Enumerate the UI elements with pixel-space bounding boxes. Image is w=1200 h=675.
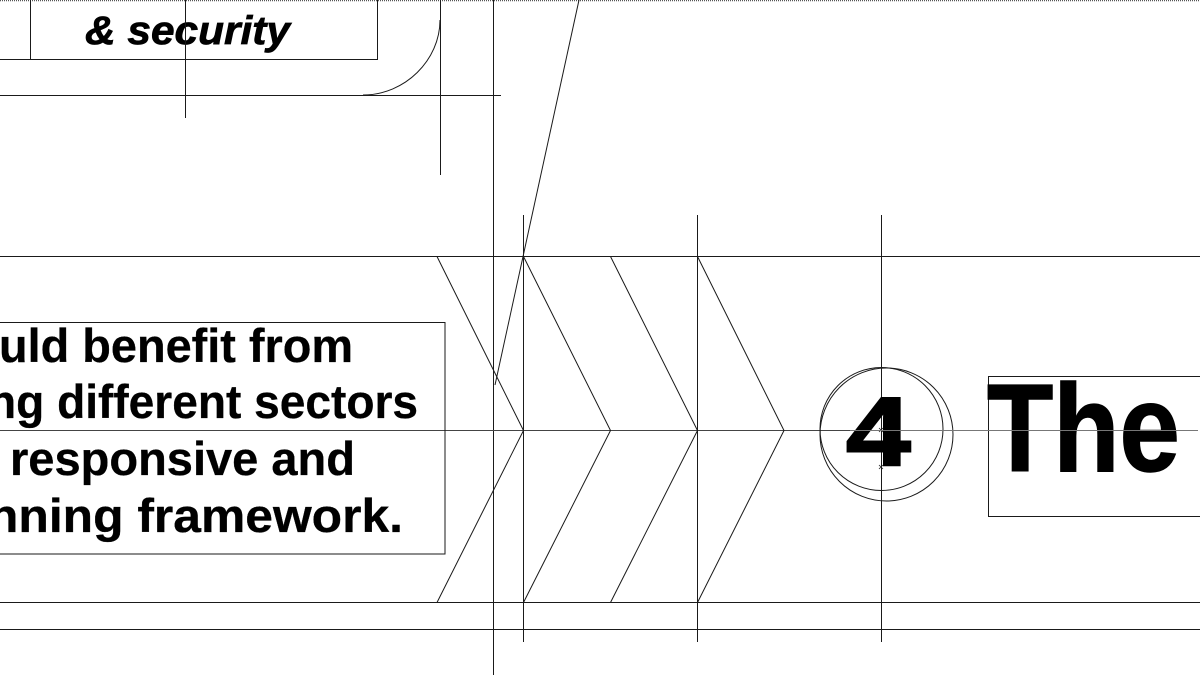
top border: [0, 0, 1200, 2]
heading fragment: The: The: [987, 359, 1180, 498]
redrawn guide over heading text: [850, 430, 1198, 432]
heading fragment: & security: & security: [85, 9, 292, 53]
heading fragment: & security: [0, 0, 378, 60]
step number badge: 4: 4: [846, 377, 911, 486]
text block: planning framework statement: [0, 319, 445, 554]
text block: planning framework statement: responsive and: [10, 432, 355, 485]
connector: curved corner: [0, 0, 501, 175]
text block: planning framework statement: ng different sectors: [0, 375, 418, 428]
arrow: chevron group: [437, 256, 784, 602]
step number badge: 4: [820, 368, 953, 501]
text block: planning framework statement: uld benefit from: [0, 319, 353, 372]
